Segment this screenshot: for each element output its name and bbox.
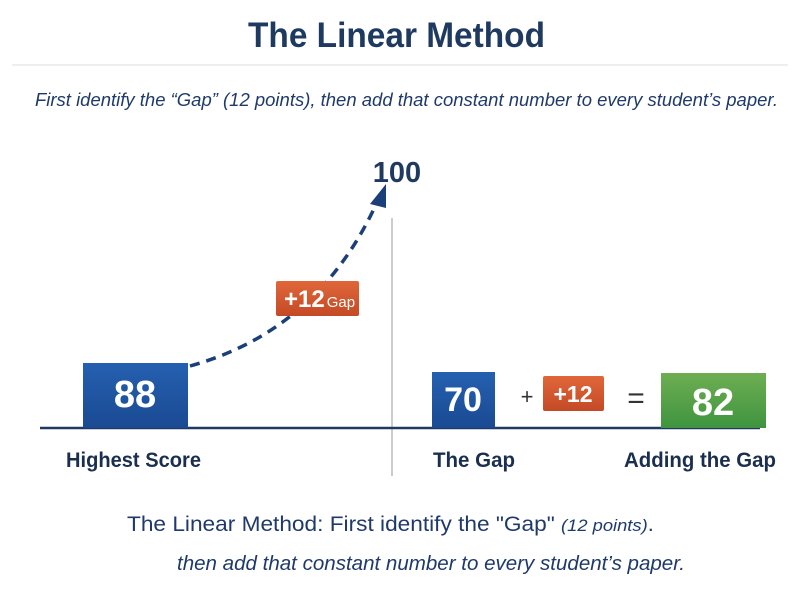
callout: +12 Gap: +12Gap	[284, 286, 355, 313]
bottom caption: then add that constant number to every student’s paper.	[177, 553, 685, 575]
box: 82: 82	[692, 382, 734, 424]
label: 100: 100	[373, 157, 421, 189]
callout: +12 Gap	[276, 281, 359, 316]
equals sign: =	[627, 382, 645, 415]
baseline	[40, 427, 760, 429]
plus sign: +	[521, 384, 533, 409]
labels: Adding the Gap	[624, 449, 776, 472]
labels	[66, 449, 776, 472]
arrow: dashed curve to 100	[190, 184, 386, 366]
bottom caption: The Linear Method: First identify the "Gap" (12 points) .	[127, 513, 654, 536]
box: +12	[543, 376, 604, 411]
bar: highest score 88: 88	[114, 374, 156, 416]
box: 70: 70	[444, 381, 482, 419]
labels: Highest Score	[66, 449, 201, 472]
box: 82	[661, 373, 766, 428]
labels: The Gap	[433, 449, 515, 472]
box: +12: +12	[553, 381, 593, 407]
box: 70	[432, 372, 495, 428]
subtitle: First identify the “Gap” (12 points), then add that constant number to every student’s paper.	[35, 90, 778, 110]
bar: highest score 88	[83, 363, 188, 428]
title: The Linear Method	[248, 16, 545, 55]
bottom caption	[127, 513, 685, 575]
